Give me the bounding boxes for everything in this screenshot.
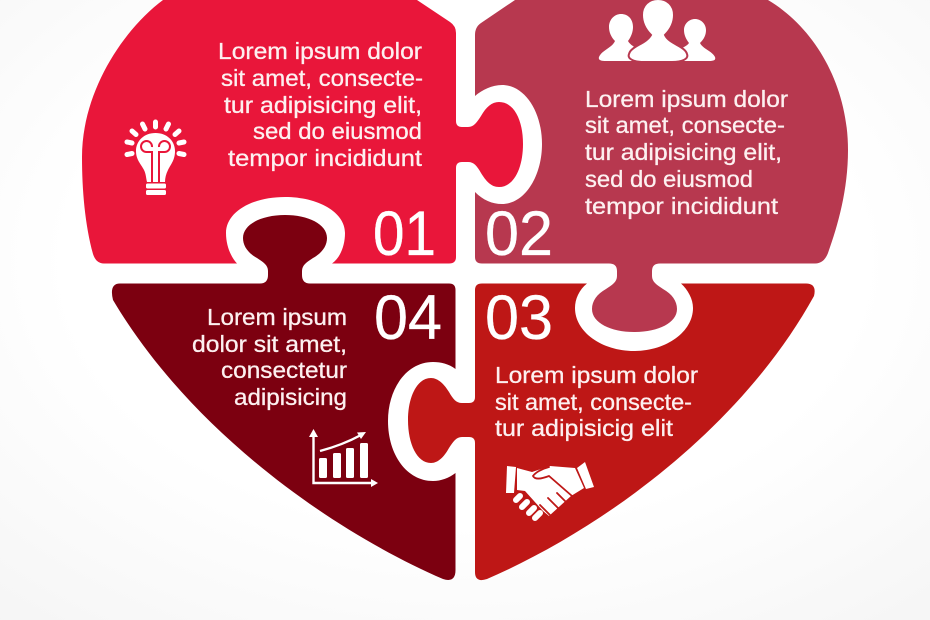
text block 01: Lorem ipsum dolor <box>218 38 422 64</box>
text block 01 <box>218 38 423 171</box>
text block 04: consectetur <box>221 357 347 383</box>
puzzle shape 03 <box>408 284 815 580</box>
number 03: 03 <box>485 283 553 353</box>
icon: group of people <box>599 0 715 62</box>
text block 03 <box>495 362 698 441</box>
text block 03: sit amet, consecte- <box>495 389 692 415</box>
text block 04 <box>192 304 347 410</box>
text block 04: Lorem ipsum <box>207 304 347 330</box>
text block 02: tur adipisicing elit, <box>585 139 782 165</box>
text block 03: tur adipisicig elit <box>495 415 674 441</box>
text block 02: sit amet, consecte- <box>585 112 785 138</box>
puzzle shape 02 <box>475 0 848 332</box>
panel: piece 04 <box>112 215 455 580</box>
panel: piece 03 <box>408 283 815 580</box>
text block 03: Lorem ipsum dolor <box>495 362 698 388</box>
icon: handshake <box>506 462 594 518</box>
text block 01: sit amet, consecte- <box>221 65 423 91</box>
text block 02 <box>585 86 788 219</box>
text block 02: sed do eiusmod <box>585 166 753 192</box>
text block 02: Lorem ipsum dolor <box>585 86 788 112</box>
puzzle shape 04 <box>112 215 455 580</box>
icon: light bulb <box>127 122 184 195</box>
text block 02: tempor incididunt <box>585 193 779 219</box>
text block 01: tur adipisicing elit, <box>224 92 422 118</box>
puzzle shape 01 <box>82 0 523 264</box>
text block 04: dolor sit amet, <box>192 331 347 357</box>
text block 04: adipisicing <box>234 384 347 410</box>
number 01: 01 <box>373 199 436 269</box>
text block 01: sed do eiusmod <box>253 118 422 144</box>
number 02: 02 <box>485 199 553 269</box>
icon: growth chart <box>309 429 378 487</box>
panel: piece 01 <box>82 0 523 269</box>
number 04: 04 <box>374 283 442 353</box>
text block 01: tempor incididunt <box>228 145 423 171</box>
panel: piece 02 <box>475 0 848 332</box>
